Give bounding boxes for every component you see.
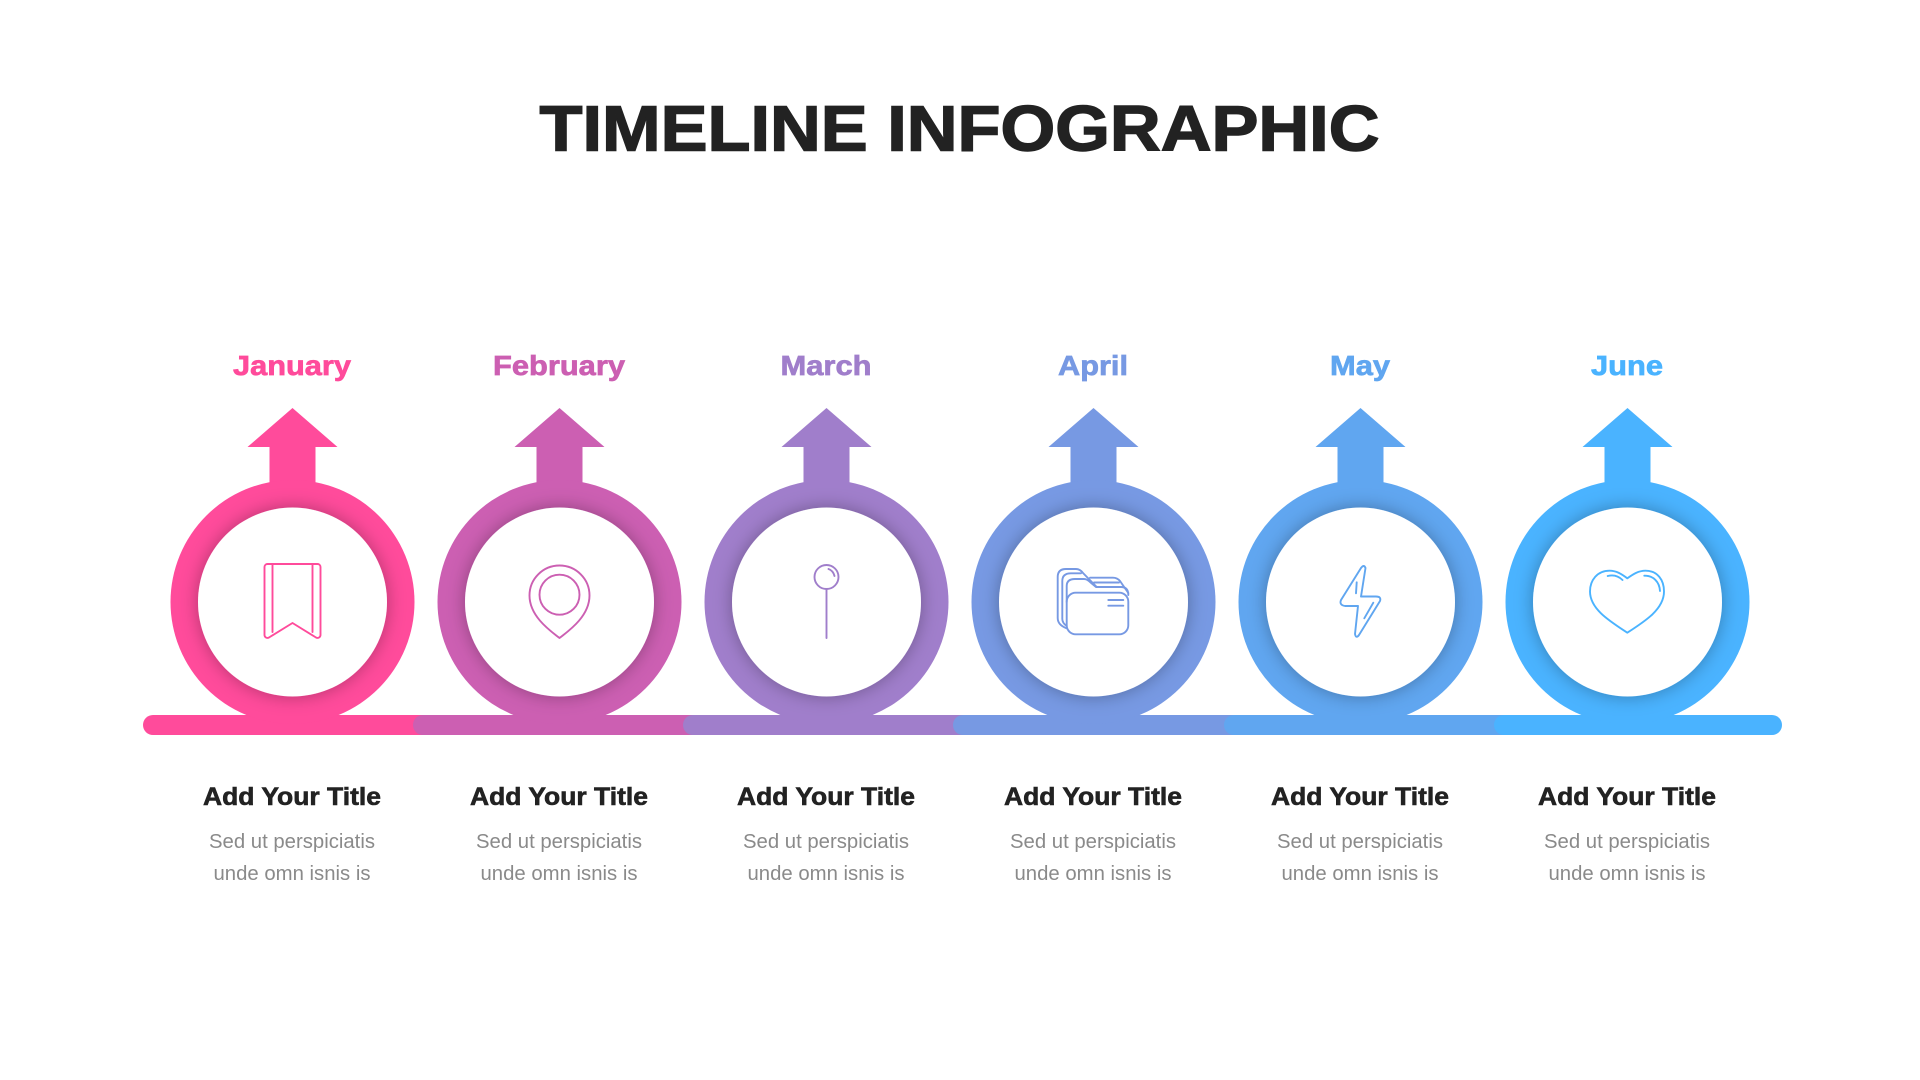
- inner circle: March: [732, 508, 921, 696]
- arrow: February: [514, 408, 604, 490]
- ring: April: [972, 480, 1216, 724]
- month label: May: May: [1330, 350, 1390, 381]
- ring: June: [1506, 480, 1750, 724]
- icon: bookmark: [264, 564, 320, 638]
- ring: May: [1238, 480, 1482, 724]
- item text: June: Sed ut perspiciatis: [1544, 830, 1710, 853]
- icon: heart: [1590, 571, 1664, 633]
- item text: June: [1544, 830, 1710, 885]
- panel: March: [704, 350, 948, 885]
- item text: February: unde omn isnis is: [480, 862, 638, 885]
- inner circle: April: [999, 508, 1188, 696]
- item text: May: [1277, 830, 1443, 885]
- item title: January: Add Your Title: [203, 783, 381, 811]
- month label: June: June: [1591, 350, 1663, 381]
- item title: June: Add Your Title: [1538, 783, 1716, 811]
- ring: January: [170, 480, 414, 724]
- arrow: April: [1048, 408, 1138, 490]
- ring: February: [438, 480, 682, 724]
- arrow: March: [782, 408, 872, 490]
- month label: April: April: [1058, 350, 1128, 381]
- item text: March: unde omn isnis is: [748, 862, 904, 885]
- panel: February: [438, 350, 682, 885]
- item text: March: [743, 830, 909, 885]
- month label: January: January: [233, 350, 351, 381]
- arrow: June: [1582, 408, 1672, 490]
- item title: April: Add Your Title: [1004, 783, 1182, 811]
- item text: May: Sed ut perspiciatis: [1277, 830, 1443, 853]
- item title: February: Add Your Title: [470, 783, 648, 811]
- inner circle: May: [1266, 508, 1455, 696]
- item text: February: Sed ut perspiciatis: [476, 830, 642, 853]
- item title: May: Add Your Title: [1271, 783, 1449, 811]
- title: TIMELINE INFOGRAPHIC: [540, 92, 1380, 164]
- panel: January: [170, 350, 414, 885]
- ring: March: [704, 480, 948, 724]
- item text: April: Sed ut perspiciatis: [1010, 830, 1176, 853]
- item text: June: unde omn isnis is: [1548, 862, 1706, 885]
- item title: March: Add Your Title: [737, 783, 915, 811]
- arrow: May: [1316, 408, 1406, 490]
- panel: May: [1238, 350, 1482, 885]
- month label: February: February: [493, 350, 625, 381]
- panel: June: [1506, 350, 1750, 885]
- inner circle: June: [1533, 508, 1722, 696]
- item text: May: unde omn isnis is: [1282, 862, 1438, 885]
- timeline bar: [143, 715, 1782, 735]
- item text: January: Sed ut perspiciatis: [209, 830, 375, 853]
- item text: February: [476, 830, 642, 885]
- icon: lightning bolt: [1340, 566, 1380, 637]
- icon: map pin: [530, 566, 590, 638]
- item text: April: unde omn isnis is: [1014, 862, 1172, 885]
- icon: push pin: [814, 565, 838, 638]
- icon: folders: [1058, 569, 1128, 634]
- month label: March: March: [780, 350, 872, 381]
- item text: January: [209, 830, 375, 885]
- panel: April: [972, 350, 1216, 885]
- inner circle: February: [465, 508, 654, 696]
- inner circle: January: [198, 508, 387, 696]
- item text: January: unde omn isnis is: [214, 862, 370, 885]
- item text: March: Sed ut perspiciatis: [743, 830, 909, 853]
- item text: April: [1010, 830, 1176, 885]
- arrow: January: [248, 408, 338, 490]
